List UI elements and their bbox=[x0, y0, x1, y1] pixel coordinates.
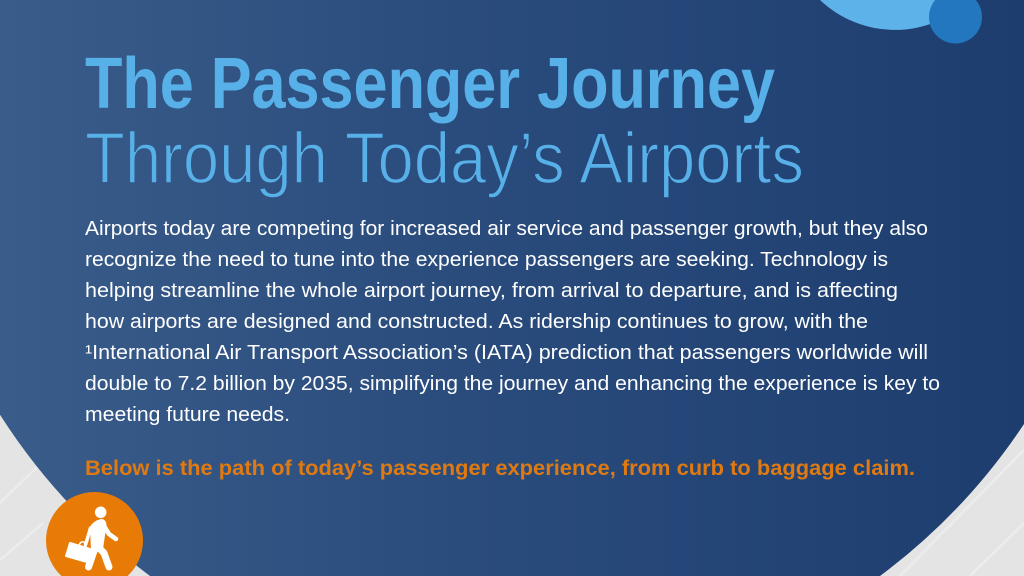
intro text block: how airports are designed and constructed. As ridership continues to grow, with the bbox=[85, 310, 868, 333]
orange callout text: Below is the path of today’s passenger experience, from curb to baggage claim. bbox=[85, 457, 915, 480]
intro text block: ¹International Air Transport Association’s (IATA) prediction that passengers worldwide will bbox=[85, 341, 928, 364]
intro text block: double to 7.2 billion by 2035, simplifying the journey and enhancing the experience is key to bbox=[85, 372, 940, 395]
intro text block: Airports today are competing for increased air service and passenger growth, but they also bbox=[85, 217, 928, 240]
intro text block: recognize the need to tune into the experience passengers are seeking. Technology is bbox=[85, 248, 888, 271]
decorative light blue circle bbox=[820, 0, 970, 30]
title: The Passenger Journey bbox=[85, 44, 775, 124]
intro text block: meeting future needs. bbox=[85, 403, 290, 426]
title bbox=[85, 44, 804, 199]
intro text block bbox=[85, 217, 940, 426]
icon: walking passenger with briefcase bbox=[46, 492, 143, 576]
title: Through Today’s Airports bbox=[85, 119, 804, 199]
intro text block: helping streamline the whole airport journey, from arrival to departure, and is affecting bbox=[85, 279, 898, 302]
decorative mid blue circle bbox=[929, 0, 982, 44]
